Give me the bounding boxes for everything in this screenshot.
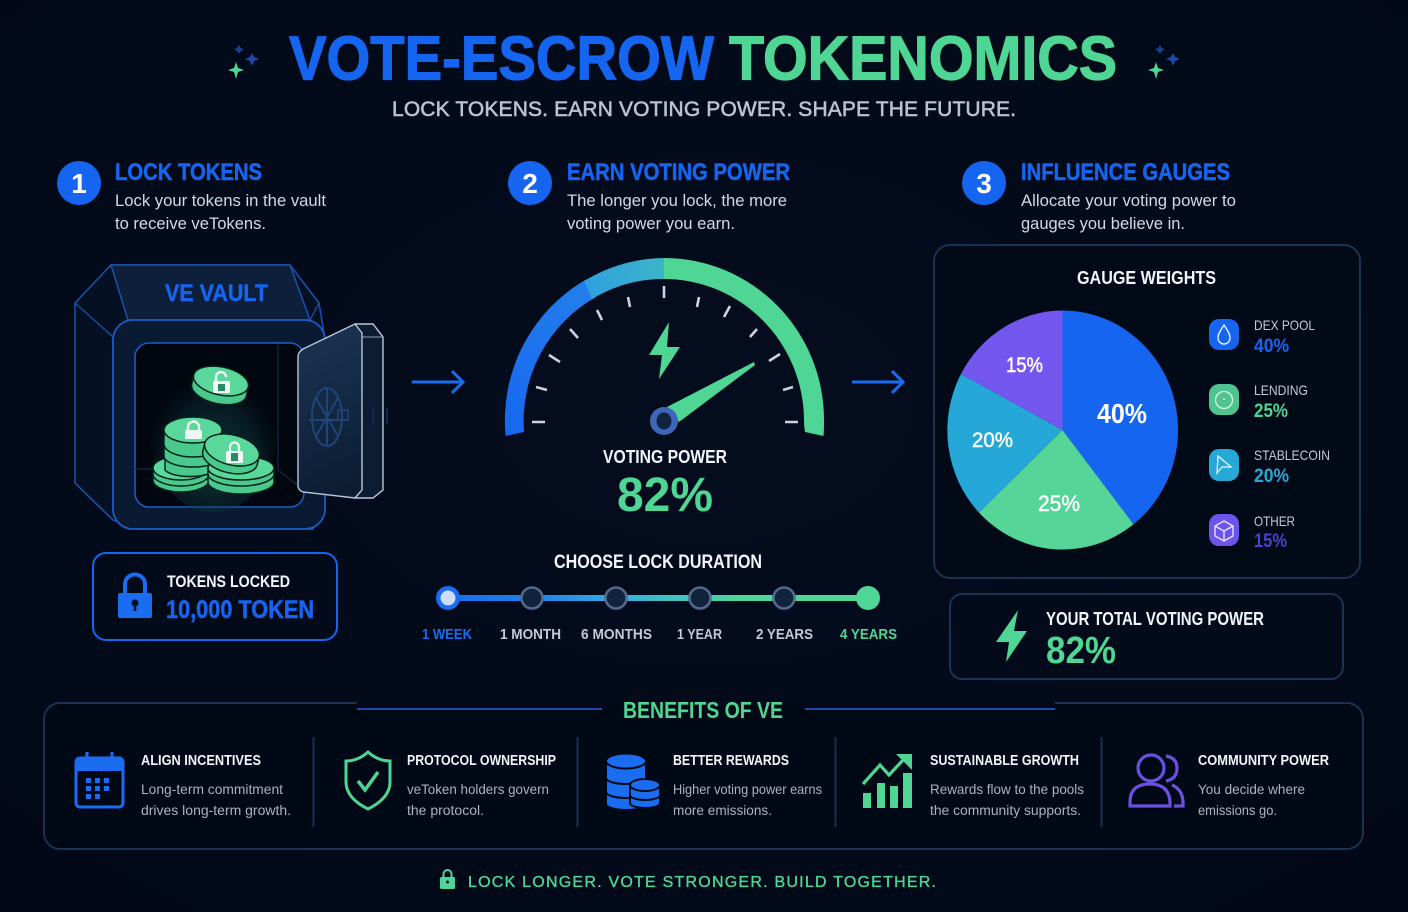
benefit: community power: You decide where (1198, 781, 1305, 797)
benefit: better rewards: more emissions. (673, 802, 772, 818)
step 3 header: INFLUENCE GAUGES (1021, 159, 1230, 186)
icon: footer padlock (440, 870, 455, 889)
benefit: sustainable growth: SUSTAINABLE GROWTH (930, 753, 1079, 769)
legend: lending (1209, 382, 1308, 422)
icon: left sparkles (228, 45, 259, 79)
benefit: align incentives: Long-term commitment (141, 781, 283, 797)
tokens locked card: 10,000 TOKEN (166, 596, 314, 624)
step 1 header: Lock your tokens in the vault (115, 191, 326, 210)
benefit: community power (1130, 753, 1329, 818)
legend: dex pool (1209, 317, 1315, 357)
lock duration selector (422, 552, 897, 643)
legend: stablecoin: STABLECOIN (1254, 447, 1330, 463)
pie chart: 40% (1097, 398, 1147, 429)
benefit: better rewards (606, 753, 822, 818)
benefit: better rewards: BETTER REWARDS (673, 753, 789, 769)
total voting power card (950, 594, 1343, 679)
title: TOKENOMICS (729, 24, 1117, 94)
tokens locked card: TOKENS LOCKED (167, 572, 290, 591)
subtitle: LOCK TOKENS. EARN VOTING POWER. SHAPE THE FUTURE. (392, 98, 1016, 121)
legend: stablecoin (1209, 447, 1330, 487)
voting power gauge (505, 258, 824, 436)
lock duration selector: 1 WEEK (422, 626, 472, 643)
lock duration selector: 4 YEARS (840, 626, 897, 643)
benefit: align incentives: ALIGN INCENTIVES (141, 753, 261, 769)
legend: other (1209, 513, 1295, 552)
vault label: VE VAULT (165, 280, 268, 307)
tokens locked card (93, 553, 337, 640)
voting power readout (603, 447, 727, 522)
step 1 header: LOCK TOKENS (115, 159, 262, 186)
benefit: protocol ownership: veToken holders govern (407, 781, 549, 797)
lock duration selector: CHOOSE LOCK DURATION (554, 552, 762, 573)
title: VOTE-ESCROW (289, 24, 714, 94)
icon: coin stacks (606, 754, 660, 810)
benefit: protocol ownership: PROTOCOL OWNERSHIP (407, 753, 556, 769)
icon: shield with check (346, 752, 390, 809)
vault illustration (75, 265, 387, 529)
step 2 header: EARN VOTING POWER (567, 159, 790, 186)
gauge hub (650, 407, 678, 435)
legend: dex pool: 40% (1254, 336, 1289, 357)
benefit: align incentives (76, 752, 291, 818)
icon: lightning bolt (996, 610, 1027, 662)
step 1 header (57, 159, 326, 233)
icon: growth chart (863, 754, 912, 808)
footer tagline: LOCK LONGER. VOTE STRONGER. BUILD TOGETHER. (468, 874, 936, 891)
panel: gauge weights: GAUGE WEIGHTS (1077, 268, 1216, 288)
lock duration selector: 1 YEAR (677, 626, 722, 643)
benefit: community power: COMMUNITY POWER (1198, 753, 1329, 769)
voting power readout: 82% (617, 469, 713, 522)
benefit: sustainable growth: the community supports. (930, 802, 1081, 818)
vault door (298, 324, 387, 498)
step 3 header: 3 (976, 168, 992, 199)
step 3 header: Allocate your voting power to (1021, 191, 1236, 210)
step 2 header: voting power you earn. (567, 214, 735, 233)
benefit: better rewards: Higher voting power earns (673, 781, 822, 797)
icon: calendar (76, 752, 123, 807)
lock duration selector: 2 YEARS (756, 626, 813, 643)
benefit: align incentives: drives long-term growth. (141, 802, 291, 818)
panel: benefits of ve (44, 697, 1363, 849)
icon: people (1130, 755, 1183, 806)
coin padlocks (185, 372, 243, 463)
pie chart: 20% (972, 429, 1013, 452)
pie chart (947, 310, 1178, 550)
step 3 header: gauges you believe in. (1021, 214, 1185, 233)
coins (153, 361, 274, 494)
title (289, 24, 1117, 94)
legend: lending: 25% (1254, 401, 1288, 422)
benefit: sustainable growth (863, 753, 1084, 818)
step 1 header: 1 (71, 168, 87, 199)
benefit: protocol ownership (346, 752, 556, 818)
legend: stablecoin: 20% (1254, 466, 1289, 487)
step 2 header: 2 (522, 168, 538, 199)
icon: lightning bolt (649, 322, 680, 379)
step 3 header (962, 159, 1236, 233)
step 1 header: to receive veTokens. (115, 214, 266, 233)
voting power readout: VOTING POWER (603, 447, 727, 467)
pie chart: 15% (1006, 354, 1043, 377)
legend: other: 15% (1254, 531, 1287, 552)
gauge ticks (532, 286, 798, 422)
benefits heading: BENEFITS OF VE (623, 697, 783, 723)
pie chart: 25% (1038, 491, 1080, 516)
icon: padlock (118, 574, 152, 618)
lock duration selector: 6 MONTHS (581, 626, 652, 643)
benefit: sustainable growth: Rewards flow to the pools (930, 781, 1084, 797)
benefit: community power: emissions go. (1198, 802, 1277, 818)
icon: right sparkles (1148, 45, 1180, 79)
arrow: step 1 to step 2 (412, 371, 463, 393)
legend: other: OTHER (1254, 513, 1295, 529)
gauge needle (667, 362, 755, 422)
total voting power card: YOUR TOTAL VOTING POWER (1046, 609, 1264, 629)
legend: dex pool: DEX POOL (1254, 317, 1315, 333)
legend: lending: LENDING (1254, 382, 1308, 398)
step 2 header (508, 159, 790, 233)
lock duration selector: 1 MONTH (500, 626, 561, 643)
arrow: step 2 to step 3 (852, 371, 903, 393)
benefit: protocol ownership: the protocol. (407, 802, 484, 818)
step 2 header: The longer you lock, the more (567, 191, 787, 210)
total voting power card: 82% (1046, 630, 1116, 672)
panel: gauge weights (934, 245, 1360, 578)
